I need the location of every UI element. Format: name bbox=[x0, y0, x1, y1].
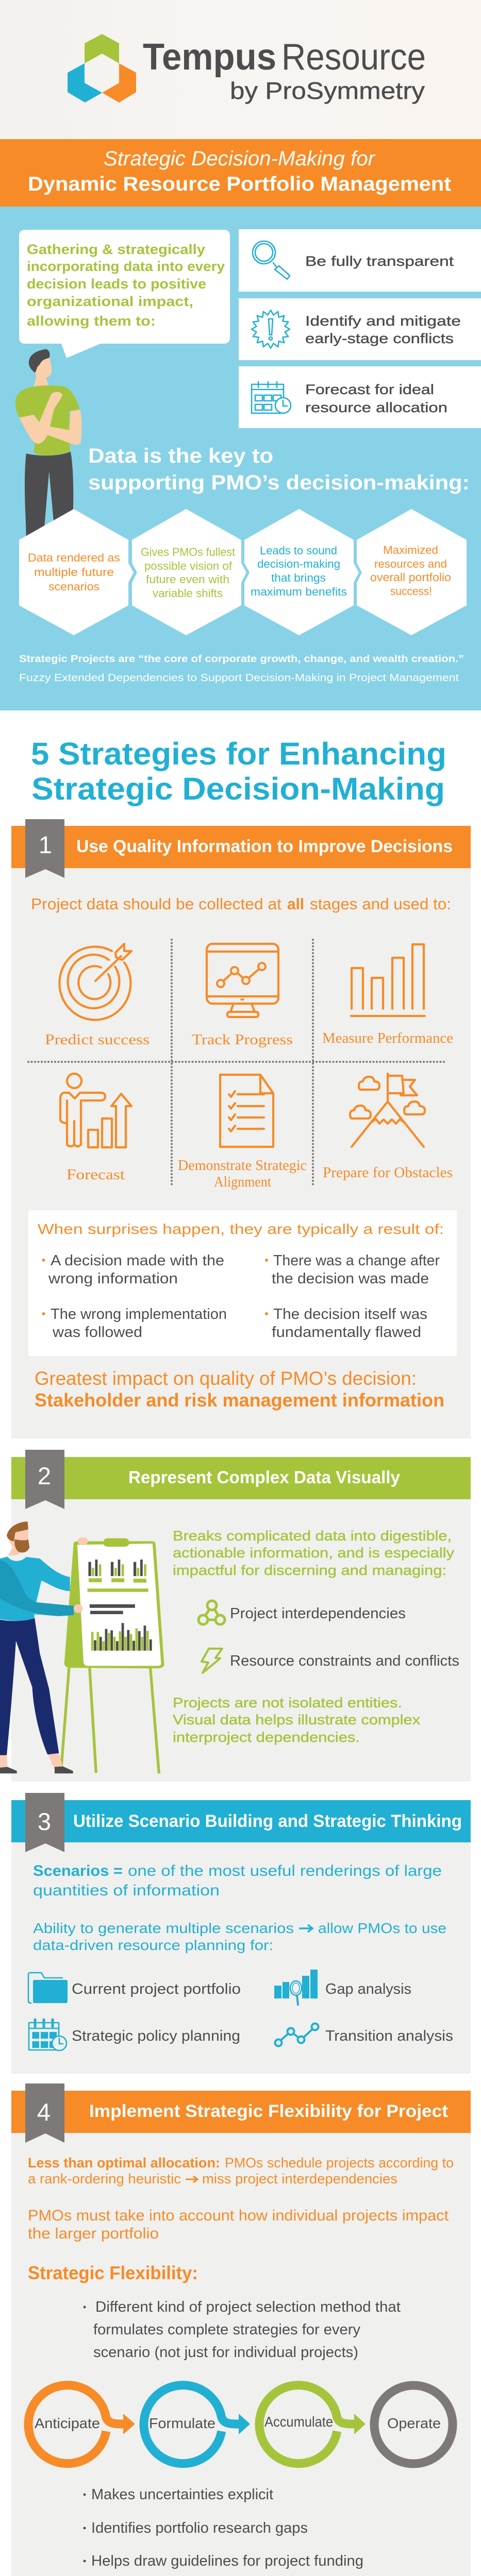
icon: person with rising bars bbox=[60, 1074, 131, 1147]
greatest impact: Stakeholder and risk management information bbox=[35, 1389, 444, 1411]
title band: Strategic Decision-Making for bbox=[104, 147, 376, 170]
step: data rendered bbox=[19, 509, 134, 635]
figure: man with flipchart bbox=[0, 1521, 164, 1773]
use: strategic alignment: Demonstrate Strategic bbox=[178, 1158, 307, 1174]
strategy 2 header: 2 bbox=[38, 1462, 51, 1489]
icon: alert burst bbox=[252, 310, 290, 348]
quote: Strategic Projects are “the core of corporate growth, change, and wealth creation.” bbox=[19, 654, 464, 665]
step: fullest vision: possible vision of bbox=[144, 560, 233, 572]
speech bubble: allowing them to: bbox=[27, 313, 156, 329]
step: accumulate bbox=[259, 2385, 366, 2464]
less than optimal: a rank-ordering heuristic bbox=[28, 2171, 181, 2187]
bullets: benefits bbox=[84, 2486, 363, 2569]
greatest impact bbox=[35, 1368, 444, 1411]
heading: data is the key bbox=[88, 445, 470, 494]
scenarios definition bbox=[33, 1862, 442, 1899]
figure: man thinking bbox=[15, 349, 82, 536]
quote: Fuzzy Extended Dependencies to Support Decision-Making in Project Management bbox=[19, 672, 459, 684]
step: maximized resources: Maximized bbox=[383, 544, 438, 556]
bullets: benefits: Helps draw guidelines for project funding bbox=[91, 2553, 363, 2569]
intro line: stages and used to: bbox=[310, 895, 451, 913]
step: fullest vision: future even with bbox=[146, 573, 229, 586]
strategy 1 header: Use Quality Information to Improve Decisions bbox=[76, 837, 453, 856]
ability text: allow PMOs to use bbox=[318, 1920, 446, 1936]
item: gap analysis bbox=[274, 1970, 411, 2005]
title band: Dynamic Resource Portfolio Management bbox=[28, 173, 451, 195]
step: maximized resources: resources and bbox=[374, 557, 447, 570]
ability text: data-driven resource planning for: bbox=[33, 1937, 273, 1953]
use: track progress: Track Progress bbox=[192, 1032, 293, 1048]
card: forecast allocation: resource allocation bbox=[305, 400, 447, 415]
intro line: Project data should be collected at bbox=[31, 895, 281, 913]
step: sound decisions: Leads to sound bbox=[260, 544, 337, 557]
item: strategic policy planning: Strategic policy planning bbox=[72, 2028, 240, 2044]
logo wordmark: by ProSymmetry bbox=[230, 77, 425, 104]
PMOs must bbox=[28, 2207, 449, 2242]
lead text: impactful for discerning and managing: bbox=[173, 1563, 446, 1578]
intro line: all bbox=[287, 895, 304, 913]
ability text: Ability to generate multiple scenarios bbox=[33, 1920, 294, 1936]
icon: trend line bbox=[275, 2024, 319, 2046]
step: operate: Operate bbox=[387, 2415, 441, 2431]
bullet: selection method bbox=[84, 2299, 401, 2361]
item: project interdependencies: Project interdependencies bbox=[230, 1605, 406, 1622]
strategy 3 header: 3 bbox=[38, 1808, 51, 1835]
box: surprises: When surprises happen, they are typically a result of: bbox=[38, 1221, 444, 1237]
header with logo bbox=[0, 0, 481, 139]
strategy 1 header: 1 bbox=[39, 831, 52, 858]
bullet: selection method: scenario (not just for individual projects) bbox=[93, 2344, 358, 2361]
item: resource constraints: Resource constraints and conflicts bbox=[230, 1653, 459, 1669]
intro line bbox=[31, 895, 451, 913]
greatest impact: Greatest impact on quality of PMO’s decision: bbox=[35, 1368, 417, 1389]
main title: Strategic Decision-Making bbox=[31, 771, 445, 806]
use: strategic alignment: Alignment bbox=[214, 1174, 271, 1190]
less than optimal: miss project interdependencies bbox=[202, 2171, 397, 2187]
strategy 4 header: Implement Strategic Flexibility for Project bbox=[89, 2102, 448, 2121]
icon: calendar bbox=[29, 2020, 67, 2050]
bullets: benefits: Identifies portfolio research gaps bbox=[91, 2520, 308, 2536]
heading: data is the key: supporting PMO’s decision-making: bbox=[88, 471, 470, 494]
icon: calendar with clock bbox=[252, 382, 291, 413]
card: forecast allocation: Forecast for ideal bbox=[305, 382, 434, 397]
less than optimal: Less than optimal allocation: bbox=[28, 2155, 220, 2171]
use: measure performance: Measure Performance bbox=[322, 1030, 453, 1046]
bullets: benefits: Makes uncertainties explicit bbox=[91, 2486, 273, 2503]
step: data rendered: scenarios bbox=[48, 580, 99, 593]
panel: intro bbox=[0, 207, 481, 710]
use: track progress bbox=[192, 944, 293, 1048]
card: identify conflicts bbox=[239, 298, 481, 360]
step: maximized resources: success! bbox=[390, 585, 432, 598]
step: formulate: Formulate bbox=[149, 2415, 215, 2431]
step: fullest vision: variable shifts bbox=[153, 587, 223, 600]
note: isolated entities bbox=[173, 1695, 421, 1745]
step: fullest vision: Gives PMOs fullest bbox=[141, 546, 235, 558]
icon: Tempus Resource logo bbox=[68, 34, 136, 103]
item: transition analysis: Transition analysis bbox=[325, 2028, 453, 2044]
strategy 4 header: 4 bbox=[37, 2098, 51, 2126]
icon: monitor chart bbox=[207, 944, 278, 1017]
step: accumulate: Accumulate bbox=[264, 2414, 333, 2430]
use: measure performance bbox=[322, 944, 453, 1046]
box: surprises: A decision made with the bbox=[51, 1252, 224, 1269]
strategy 2 header: Represent Complex Data Visually bbox=[128, 1468, 400, 1487]
speech bubble: organizational impact, bbox=[27, 294, 193, 309]
step: formulate bbox=[144, 2385, 250, 2464]
strategy 2 header bbox=[11, 1450, 471, 1509]
arrow bbox=[299, 1925, 312, 1932]
logo wordmark: Resource bbox=[281, 37, 426, 78]
strategy 3 header: Utilize Scenario Building and Strategic Thinking bbox=[73, 1811, 462, 1831]
use: prepare for obstacles bbox=[323, 1074, 453, 1181]
note: isolated entities: Visual data helps illustrate complex bbox=[173, 1712, 421, 1727]
icon: checklist document bbox=[220, 1075, 273, 1147]
icon: magnifying glass bbox=[253, 241, 290, 279]
speech bubble: incorporating data into every bbox=[27, 259, 225, 274]
step: fullest vision bbox=[132, 509, 246, 635]
less than optimal bbox=[28, 2155, 454, 2187]
icon: bars with magnifier bbox=[274, 1970, 318, 2005]
logo wordmark bbox=[143, 37, 426, 104]
lead text bbox=[173, 1528, 455, 1578]
step: sound decisions: maximum benefits bbox=[251, 585, 347, 598]
use: strategic alignment bbox=[178, 1075, 307, 1190]
strategy 4 header bbox=[11, 2083, 471, 2143]
item: project interdependencies bbox=[198, 1601, 406, 1624]
use: forecast: Forecast bbox=[67, 1167, 125, 1183]
card: be fully transparent bbox=[239, 229, 481, 292]
step: anticipate: Anticipate bbox=[35, 2415, 100, 2431]
panel: strategy 2 bbox=[0, 1450, 471, 1782]
arrow bbox=[186, 2176, 197, 2182]
box: surprises: fundamentally flawed bbox=[272, 1324, 421, 1341]
box: surprises: was followed bbox=[52, 1324, 142, 1341]
lead text: actionable information, and is especially bbox=[173, 1545, 455, 1561]
note: isolated entities: Projects are not isolated entities. bbox=[173, 1695, 402, 1710]
use: prepare for obstacles: Prepare for Obstacles bbox=[323, 1165, 453, 1181]
card: be fully transparent: Be fully transparent bbox=[305, 253, 454, 269]
icon: bar chart bbox=[351, 944, 425, 1016]
icon: folder bbox=[28, 1973, 68, 2003]
less than optimal: PMOs schedule projects according to bbox=[225, 2155, 454, 2171]
item: strategic policy planning bbox=[29, 2020, 240, 2050]
card: forecast allocation bbox=[239, 366, 481, 428]
title band bbox=[0, 139, 481, 207]
item: transition analysis bbox=[275, 2024, 453, 2046]
box: surprises: The decision itself was bbox=[273, 1306, 427, 1323]
heading: data is the key: Data is the key to bbox=[88, 445, 273, 467]
scenarios definition: Scenarios = bbox=[33, 1862, 123, 1879]
strategy 1 header bbox=[11, 819, 471, 878]
use: predict success bbox=[45, 944, 150, 1048]
bullet: selection method: formulates complete strategies for every bbox=[93, 2321, 360, 2338]
step: sound decisions bbox=[244, 509, 359, 635]
use: forecast bbox=[60, 1074, 131, 1183]
use: predict success: Predict success bbox=[45, 1032, 150, 1048]
bullet: selection method: Different kind of project selection method that bbox=[95, 2299, 401, 2315]
item: resource constraints bbox=[202, 1649, 459, 1673]
note: isolated entities: interproject dependencies. bbox=[173, 1730, 360, 1745]
step: operate bbox=[374, 2385, 453, 2464]
PMOs must: the larger portfolio bbox=[28, 2225, 159, 2242]
box: surprises bbox=[28, 1210, 457, 1356]
scenarios definition: quantities of information bbox=[33, 1882, 220, 1899]
card: identify conflicts: early-stage conflicts bbox=[305, 331, 454, 346]
main title: 5 Strategies for Enhancing bbox=[31, 736, 446, 771]
item: current project portfolio bbox=[28, 1973, 241, 2003]
box: surprises: wrong information bbox=[48, 1270, 178, 1287]
step: maximized resources: overall portfolio bbox=[370, 571, 451, 584]
speech bubble bbox=[19, 230, 230, 358]
step: maximized resources bbox=[357, 509, 467, 635]
main title bbox=[31, 736, 446, 806]
card: identify conflicts: Identify and mitigate bbox=[305, 313, 461, 329]
step: sound decisions: that brings bbox=[271, 571, 326, 584]
strategy 3 header bbox=[11, 1793, 471, 1852]
panel: strategy 1 bbox=[11, 819, 471, 1438]
step: data rendered: Data rendered as bbox=[28, 551, 120, 564]
icon: network bbox=[198, 1601, 225, 1624]
heading: strategic flexibility: Strategic Flexibility: bbox=[28, 2262, 198, 2283]
speech bubble: decision leads to positive bbox=[27, 276, 206, 292]
box: surprises: There was a change after bbox=[273, 1252, 440, 1269]
icon: lightning bolt bbox=[202, 1649, 222, 1673]
step: sound decisions: decision-making bbox=[257, 557, 340, 570]
panel: strategy 4 bbox=[11, 2083, 471, 2576]
lead text: Breaks complicated data into digestible, bbox=[173, 1528, 452, 1544]
quote bbox=[19, 654, 464, 684]
speech bubble: Gathering & strategically bbox=[27, 242, 205, 257]
box: surprises: the decision was made bbox=[272, 1270, 429, 1287]
step: data rendered: multiple future bbox=[34, 566, 114, 579]
ability text bbox=[33, 1920, 446, 1953]
item: gap analysis: Gap analysis bbox=[325, 1981, 411, 1997]
step: anticipate bbox=[28, 2385, 135, 2464]
item: current project portfolio: Current project portfolio bbox=[72, 1981, 241, 1997]
icon: target bbox=[59, 944, 131, 1020]
logo wordmark: Tempus bbox=[143, 37, 276, 78]
box: surprises: The wrong implementation bbox=[51, 1306, 227, 1323]
icon: mountain with flag bbox=[350, 1074, 425, 1147]
scenarios definition: one of the most useful renderings of large bbox=[128, 1862, 442, 1879]
PMOs must: PMOs must take into account how individual projects impact bbox=[28, 2207, 449, 2224]
panel: strategy 3 bbox=[11, 1793, 471, 2074]
